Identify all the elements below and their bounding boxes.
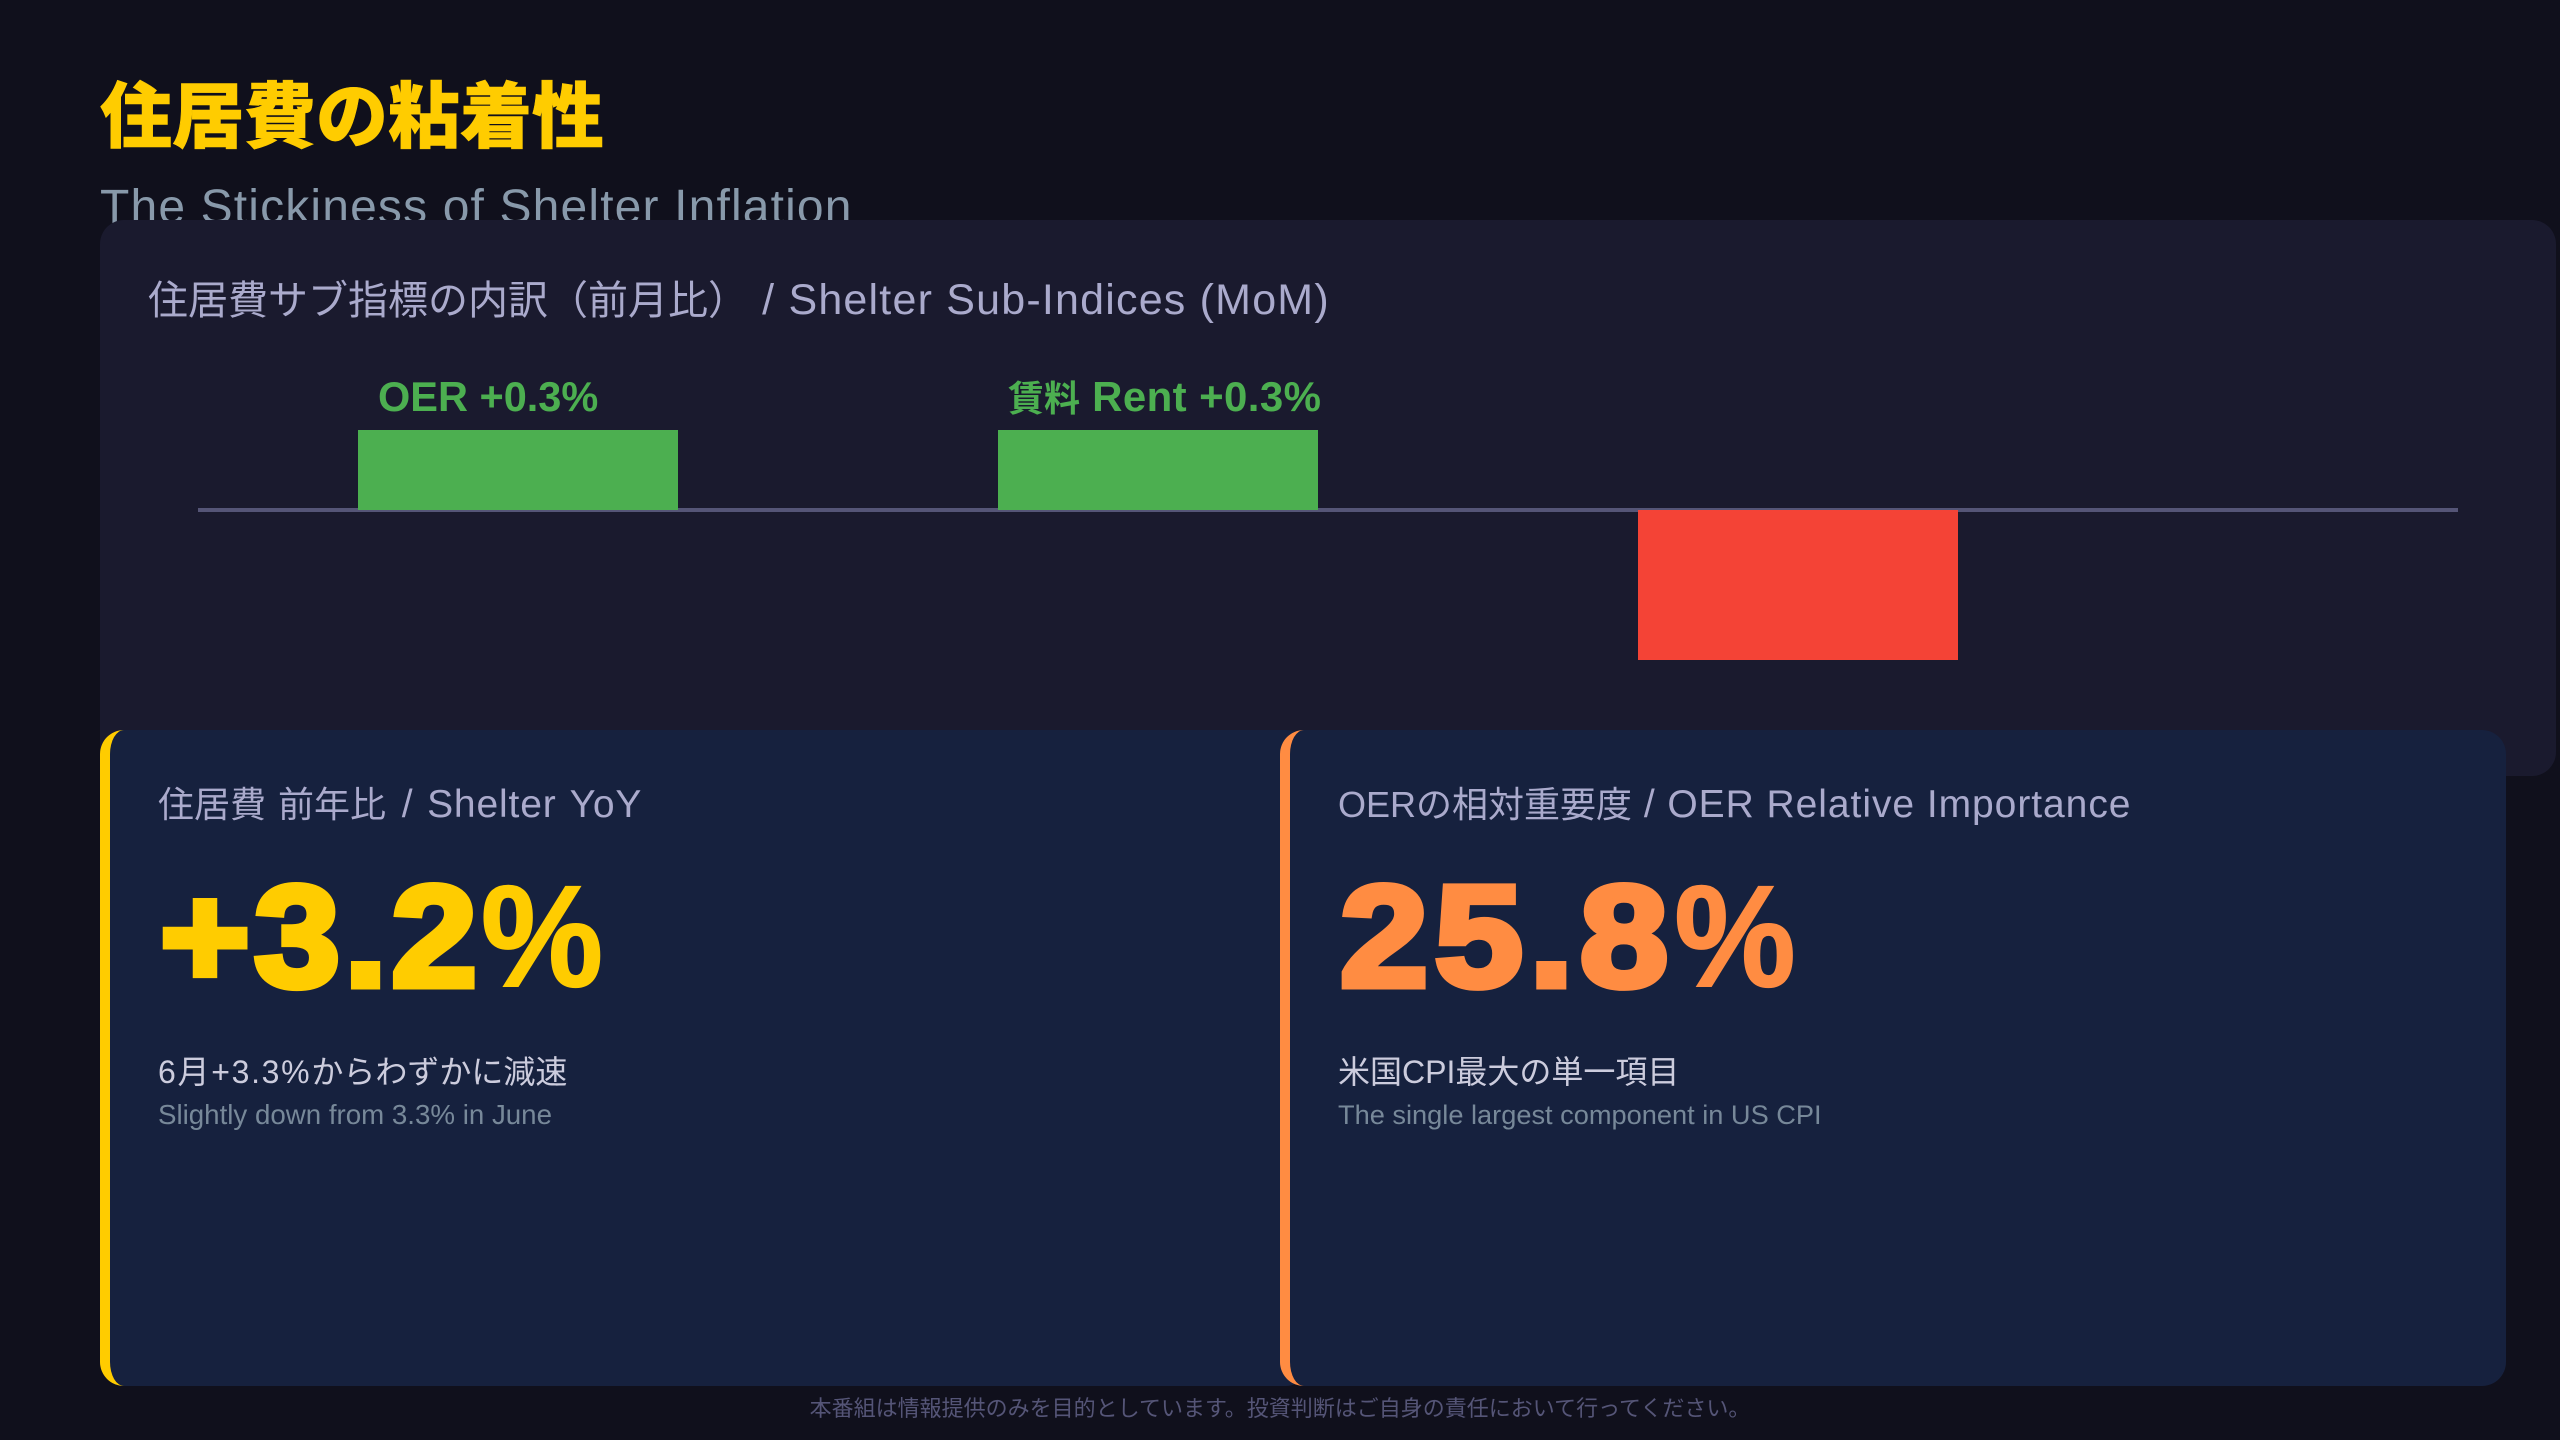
key figure: 25.8 <box>1340 856 1675 1017</box>
bar: OER <box>358 430 678 510</box>
axis line <box>198 508 2458 512</box>
subtitle: The Stickiness of Shelter Inflation <box>100 181 853 234</box>
card heading: 住居費 前年比 / Shelter YoY <box>158 783 642 826</box>
English note: The single largest component in US CPI <box>1338 1099 1822 1130</box>
key figure: % <box>481 856 603 1017</box>
Japanese note: 米国CPI最大の単一項目 <box>1338 1054 1679 1090</box>
bar: negative component <box>1638 510 1958 660</box>
footer disclaimer: 本番組は情報提供のみを目的としています。投資判断はご自身の責任において行ってください。 <box>810 1396 1750 1421</box>
card heading: OERの相対重要度 / OER Relative Importance <box>1338 783 2131 826</box>
Japanese note: 6月+3.3%からわずかに減速 <box>158 1054 567 1090</box>
bar label: Rent: 賃料 Rent +0.3% <box>1008 373 1321 420</box>
panel: shelter sub-indices chart <box>100 220 2556 776</box>
card: shelter YoY <box>100 730 1310 1386</box>
panel heading: 住居費サブ指標の内訳（前月比） / Shelter Sub-Indices (MoM) <box>148 276 1330 324</box>
bar label: OER: OER +0.3% <box>378 373 598 420</box>
card: OER relative importance <box>1280 730 2506 1386</box>
key figure: % <box>1675 856 1796 1017</box>
bar: Rent <box>998 430 1318 510</box>
title: 住居費の粘着性 <box>100 58 604 163</box>
key figure: +3.2 <box>160 856 481 1017</box>
English note: Slightly down from 3.3% in June <box>158 1099 552 1130</box>
